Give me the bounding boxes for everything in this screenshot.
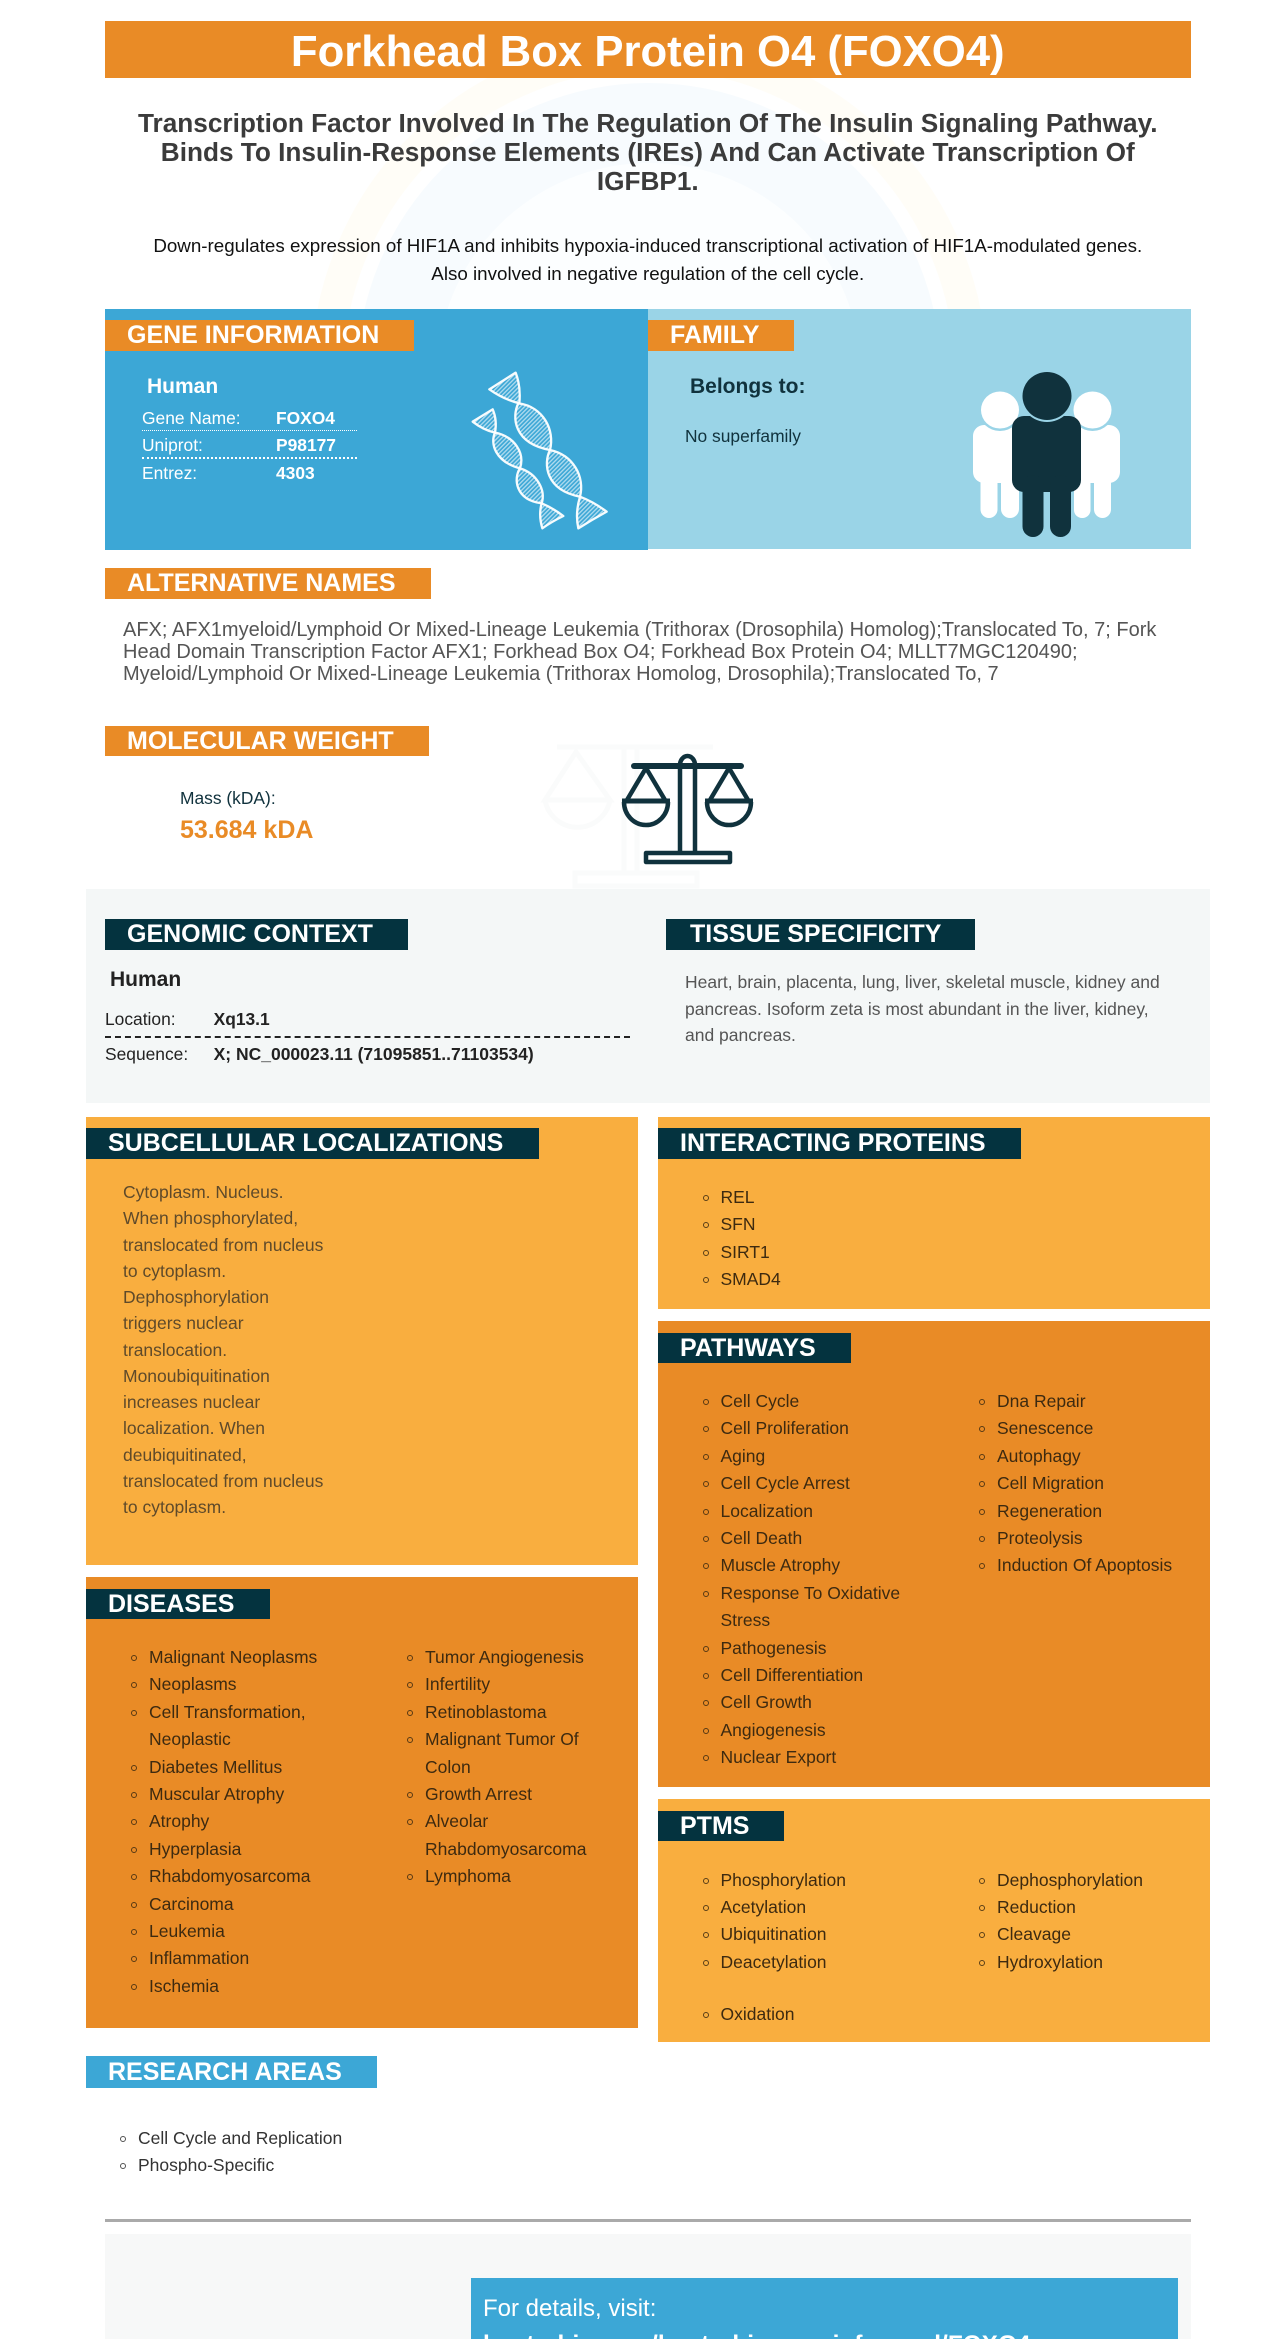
disease list column 2: Malignant Tumor Of xyxy=(425,1729,579,1749)
protein list xyxy=(703,1187,781,1289)
disease list column 1: Diabetes Mellitus xyxy=(149,1757,282,1777)
protein list: SFN xyxy=(720,1214,756,1234)
pathway list column 2 xyxy=(979,1391,1172,1575)
tissue specificity text: Heart, brain, placenta, lung, liver, skeletal muscle, kidney and xyxy=(685,972,1160,992)
disease list column 1: Rhabdomyosarcoma xyxy=(149,1866,310,1886)
pathway list column 2: Senescence xyxy=(997,1418,1093,1438)
mass value: 53.684 kDA xyxy=(180,816,313,844)
sequence row: Sequence: xyxy=(105,1044,188,1064)
PTM list column 1: Oxidation xyxy=(720,2004,794,2024)
entrez row: 4303 xyxy=(276,463,315,483)
panel: footer xyxy=(105,2234,1190,2339)
disease list column 1: Ischemia xyxy=(149,1976,219,1996)
family value: No superfamily xyxy=(685,426,801,446)
panel: genomic context and tissue specificity xyxy=(86,889,1210,1103)
pathway list column 1: Muscle Atrophy xyxy=(720,1555,840,1575)
disease list column 2 xyxy=(407,1647,586,1886)
research areas list: Phospho-Specific xyxy=(138,2155,274,2175)
disease list column 2: Alveolar xyxy=(425,1811,488,1831)
gene name row xyxy=(142,406,357,431)
gene name row: FOXO4 xyxy=(276,408,335,428)
heading: research areas: RESEARCH AREAS xyxy=(108,2058,342,2086)
gene name row: Gene Name: xyxy=(142,408,241,428)
tissue specificity text: pancreas. Isoform zeta is most abundant in the liver, kidney, xyxy=(685,998,1149,1018)
pathway list column 2: Proteolysis xyxy=(997,1528,1083,1548)
panel: pathways xyxy=(658,1321,1210,1787)
localization text: deubiquitinated, xyxy=(123,1444,247,1464)
PTM list column 2: Hydroxylation xyxy=(997,1952,1103,1972)
icon: DNA helices xyxy=(472,372,608,530)
species label: Human xyxy=(110,968,181,991)
heading: family xyxy=(648,320,794,351)
localization text: translocated from nucleus xyxy=(123,1234,323,1254)
heading: family: FAMILY xyxy=(670,321,759,349)
location row: Location: xyxy=(105,1009,176,1029)
disease list column 1: Atrophy xyxy=(149,1811,209,1831)
pathway list column 1: Localization xyxy=(720,1501,813,1521)
localization text: translocation. xyxy=(123,1340,227,1360)
heading: PTMs: PTMS xyxy=(680,1812,749,1840)
pathway list column 2: Dna Repair xyxy=(997,1391,1086,1411)
uniprot row xyxy=(142,433,357,459)
localization text: Dephosphorylation xyxy=(123,1287,269,1307)
pathway list column 1: Stress xyxy=(720,1610,770,1630)
belongs to label: Belongs to: xyxy=(690,375,806,398)
pathway list column 1: Nuclear Export xyxy=(720,1747,836,1767)
entrez row: Entrez: xyxy=(142,463,197,483)
footer rule xyxy=(105,2219,1190,2222)
description: Down-regulates expression of HIF1A and inhibits hypoxia-induced transcriptional activation of HIF1A-modulated genes. xyxy=(153,235,1142,256)
heading: gene information: GENE INFORMATION xyxy=(127,321,379,349)
disease list column 2: Colon xyxy=(425,1757,471,1777)
subtitle: IGFBP1. xyxy=(597,166,699,196)
PTM list column 2: Cleavage xyxy=(997,1924,1071,1944)
subtitle xyxy=(138,108,1157,196)
disease list column 2: Growth Arrest xyxy=(425,1784,532,1804)
disease list column 1 xyxy=(131,1647,317,1996)
PTM list column 1: Deacetylation xyxy=(720,1952,827,1972)
protein list: SIRT1 xyxy=(720,1242,770,1262)
pathway list column 1: Cell Cycle xyxy=(720,1391,799,1411)
pathway list column 1: Cell Death xyxy=(720,1528,802,1548)
description xyxy=(153,235,1142,284)
heading: interacting proteins: INTERACTING PROTEINS xyxy=(680,1129,986,1157)
disease list column 1: Neoplastic xyxy=(149,1729,231,1749)
pathway list column 1: Angiogenesis xyxy=(720,1720,826,1740)
disease list column 1: Inflammation xyxy=(149,1948,249,1968)
pathway list column 1: Cell Proliferation xyxy=(720,1418,849,1438)
research areas list xyxy=(120,2128,342,2175)
PTM list column 2: Reduction xyxy=(997,1897,1076,1917)
entrez row xyxy=(142,463,315,483)
heading: pathways: PATHWAYS xyxy=(680,1334,816,1362)
localization text xyxy=(123,1182,323,1517)
location row xyxy=(105,1007,630,1038)
disease list column 1: Leukemia xyxy=(149,1921,225,1941)
panel: diseases xyxy=(86,1577,638,2028)
PTM list column 1 xyxy=(703,1870,846,2024)
alternative names text: Head Domain Transcription Factor AFX1; Forkhead Box O4; Forkhead Box Protein O4; MLLT7MGC120490; xyxy=(123,640,1078,662)
PTM list column 1: Phosphorylation xyxy=(720,1870,846,1890)
heading: genomic context: GENOMIC CONTEXT xyxy=(127,920,373,948)
localization text: to cytoplasm. xyxy=(123,1261,226,1281)
disease list column 1: Muscular Atrophy xyxy=(149,1784,284,1804)
pathway list column 1: Cell Cycle Arrest xyxy=(720,1473,850,1493)
heading: diseases: DISEASES xyxy=(108,1590,234,1618)
panel: subcellular localizations xyxy=(86,1117,638,1565)
localization text: increases nuclear xyxy=(123,1392,260,1412)
disease list column 1: Neoplasms xyxy=(149,1674,237,1694)
pathway list column 2: Regeneration xyxy=(997,1501,1102,1521)
subtitle: Binds To Insulin-Response Elements (IREs) And Can Activate Transcription Of xyxy=(161,137,1135,167)
background watermark logo xyxy=(280,70,1020,310)
heading: diseases xyxy=(86,1589,270,1619)
disease list column 1: Carcinoma xyxy=(149,1894,234,1914)
icon: balance scale xyxy=(622,754,754,864)
tissue specificity text: and pancreas. xyxy=(685,1025,796,1045)
disease list column 2: Infertility xyxy=(425,1674,490,1694)
disease list column 1: Malignant Neoplasms xyxy=(149,1647,317,1667)
icon: ghost balance scale xyxy=(535,725,725,890)
title banner: Forkhead Box Protein O4 (FOXO4) xyxy=(291,27,1005,76)
details label: For details, visit: xyxy=(483,2295,656,2322)
uniprot row: P98177 xyxy=(276,435,336,455)
panel: PTMs xyxy=(658,1799,1210,2042)
PTM list column 2 xyxy=(979,1870,1143,1972)
heading: PTMs xyxy=(658,1811,784,1841)
heading: tissue specificity: TISSUE SPECIFICITY xyxy=(690,920,941,948)
panel: gene information xyxy=(105,309,648,550)
pathway list column 1: Cell Growth xyxy=(720,1692,812,1712)
pathway list column 1: Cell Differentiation xyxy=(720,1665,863,1685)
heading: subcellular localizations: SUBCELLULAR LOCALIZATIONS xyxy=(108,1129,503,1157)
localization text: When phosphorylated, xyxy=(123,1208,298,1228)
icon: group of people xyxy=(973,372,1120,537)
PTM list column 1: Acetylation xyxy=(720,1897,806,1917)
panel: family xyxy=(648,309,1190,549)
localization text: Monoubiquitination xyxy=(123,1366,270,1386)
pathway list column 1: Pathogenesis xyxy=(720,1638,827,1658)
uniprot row: Uniprot: xyxy=(142,435,203,455)
pathway list column 2: Cell Migration xyxy=(997,1473,1104,1493)
disease list column 2: Tumor Angiogenesis xyxy=(425,1647,584,1667)
PTM list column 1: Ubiquitination xyxy=(720,1924,827,1944)
disease list column 2: Lymphoma xyxy=(425,1866,511,1886)
protein list: REL xyxy=(720,1187,755,1207)
species label: Human xyxy=(147,375,218,398)
heading: alternative names: ALTERNATIVE NAMES xyxy=(127,569,396,597)
disease list column 2: Retinoblastoma xyxy=(425,1702,547,1722)
alternative names text: Myeloid/Lymphoid Or Mixed-Lineage Leukemia (Trithorax Homolog, Drosophila);Translocated To, 7 xyxy=(123,662,999,684)
tissue specificity text xyxy=(685,972,1160,1045)
heading: pathways xyxy=(658,1333,851,1363)
location row: Xq13.1 xyxy=(214,1009,270,1029)
localization text: triggers nuclear xyxy=(123,1313,244,1333)
mass label: Mass (kDA): xyxy=(180,788,276,808)
localization text: localization. When xyxy=(123,1418,265,1438)
protein list: SMAD4 xyxy=(720,1269,781,1289)
disease list column 1: Hyperplasia xyxy=(149,1839,241,1859)
PTM list column 2: Dephosphorylation xyxy=(997,1870,1143,1890)
callout: details link xyxy=(471,2278,1178,2339)
pathway list column 1 xyxy=(703,1391,900,1767)
pathway list column 2: Induction Of Apoptosis xyxy=(997,1555,1172,1575)
sequence row: X; NC_000023.11 (71095851..71103534) xyxy=(214,1044,534,1064)
research areas list: Cell Cycle and Replication xyxy=(138,2128,342,2148)
panel: interacting proteins xyxy=(658,1117,1210,1309)
pathway list column 1: Response To Oxidative xyxy=(720,1583,900,1603)
alternative names text xyxy=(123,618,1156,684)
title banner xyxy=(105,21,1190,78)
localization text: to cytoplasm. xyxy=(123,1497,226,1517)
description: Also involved in negative regulation of the cell cycle. xyxy=(431,263,864,284)
alternative names text: AFX; AFX1myeloid/Lymphoid Or Mixed-Lineage Leukemia (Trithorax (Drosophila) Homolog);Translocated To, 7; Fork xyxy=(123,618,1156,640)
pathway list column 2: Autophagy xyxy=(997,1446,1081,1466)
pathway list column 1: Aging xyxy=(720,1446,765,1466)
disease list column 1: Cell Transformation, xyxy=(149,1702,306,1722)
localization text: Cytoplasm. Nucleus. xyxy=(123,1182,283,1202)
heading: molecular weight: MOLECULAR WEIGHT xyxy=(127,727,394,755)
localization text: translocated from nucleus xyxy=(123,1471,323,1491)
disease list column 2: Rhabdomyosarcoma xyxy=(425,1839,586,1859)
subtitle: Transcription Factor Involved In The Regulation Of The Insulin Signaling Pathway. xyxy=(138,108,1157,138)
